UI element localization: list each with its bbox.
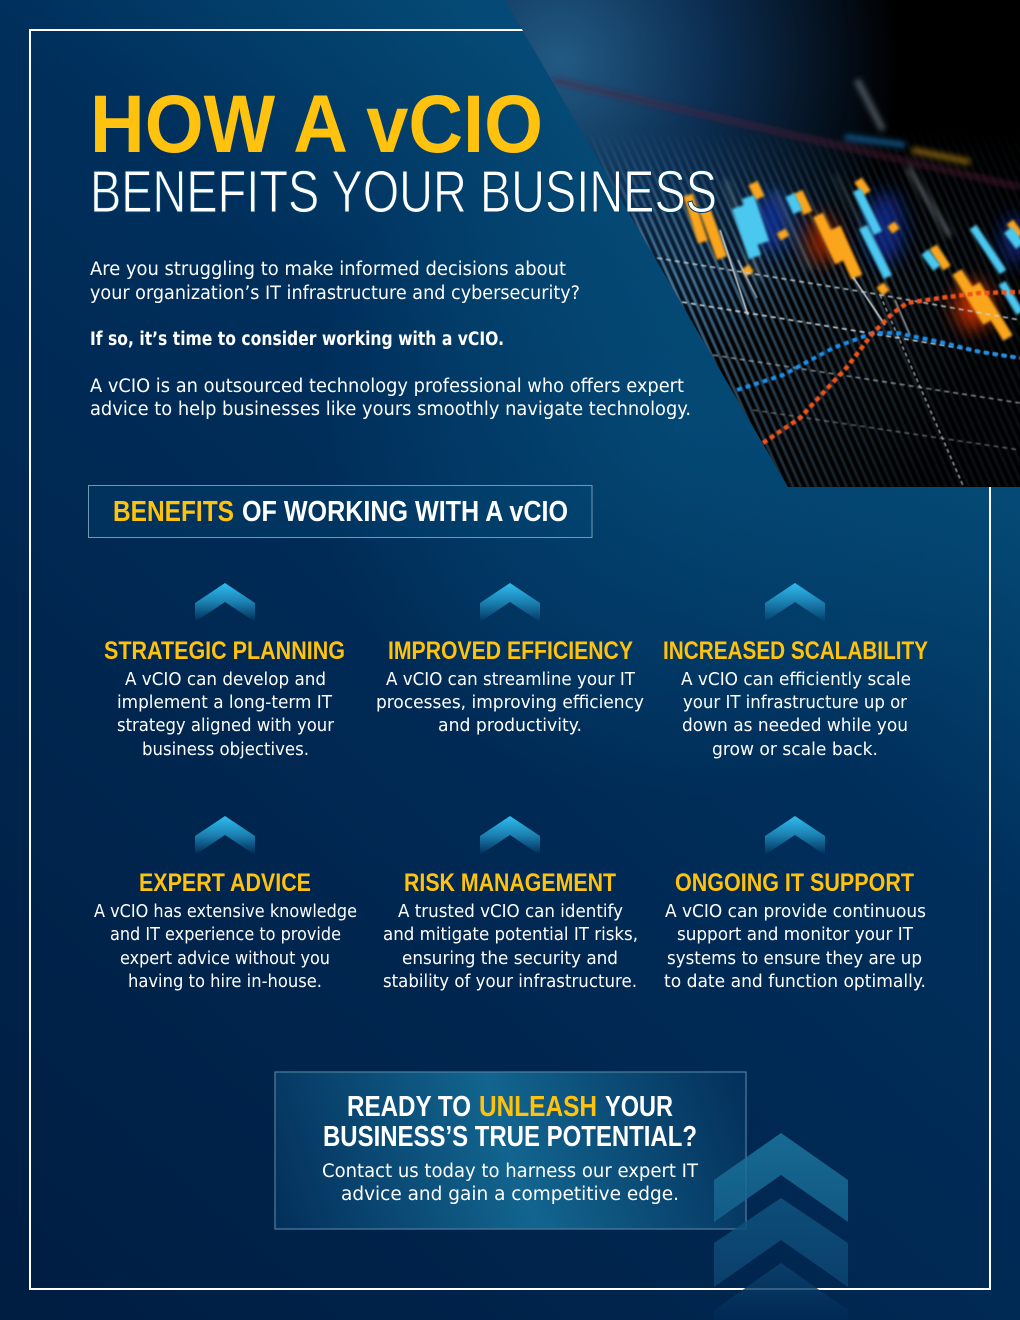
- candlesticks: orange: [688, 180, 1020, 338]
- title: BENEFITS YOUR BUSINESS: [90, 159, 717, 225]
- description: A vCIO can provide continuous: [665, 902, 926, 922]
- description: ensuring the security and: [402, 949, 618, 969]
- title: [90, 79, 717, 225]
- description: A vCIO has extensive knowledge: [94, 902, 357, 922]
- cta text: Contact us today to harness our expert IT: [322, 1161, 699, 1182]
- title: HOW A vCIO: [90, 79, 543, 170]
- description: implement a long-term IT: [117, 693, 332, 713]
- intro text: If so, it’s time to consider working with a vCIO.: [90, 329, 504, 350]
- description: A vCIO can efficiently scale: [681, 670, 911, 690]
- benefits heading box: [88, 486, 592, 538]
- description: [376, 670, 644, 736]
- red trend line: [763, 292, 1020, 443]
- heading: RISK MANAGEMENT: [404, 869, 616, 897]
- description: [681, 670, 911, 760]
- dashed grid lines: [657, 258, 1020, 490]
- icon: chevron: [480, 583, 540, 622]
- description: [383, 902, 638, 992]
- cta headline: UNLEASH: [479, 1091, 597, 1123]
- heading: STRATEGIC PLANNING: [104, 637, 345, 665]
- intro text: [90, 259, 691, 420]
- description: systems to ensure they are up: [667, 949, 922, 969]
- light wicks: [720, 230, 910, 335]
- fine diagonal stripes: [596, 144, 1020, 487]
- benefit: ongoing it support: [664, 816, 926, 992]
- description: your IT infrastructure up or: [683, 693, 908, 713]
- description: stability of your infrastructure.: [383, 972, 637, 992]
- icon: chevron: [195, 816, 255, 855]
- trading chart image panel: [500, 0, 1020, 490]
- heading: EXPERT ADVICE: [139, 869, 311, 897]
- benefits heading box: OF WORKING WITH A vCIO: [242, 496, 568, 528]
- description: grow or scale back.: [712, 740, 878, 760]
- description: processes, improving efficiency: [376, 693, 644, 713]
- benefit: risk management: [383, 816, 638, 992]
- blurred glows: [756, 192, 1020, 330]
- call to action panel: [275, 1072, 746, 1229]
- description: to date and function optimally.: [664, 972, 926, 992]
- heading: INCREASED SCALABILITY: [663, 637, 928, 665]
- description: A vCIO can develop and: [125, 670, 326, 690]
- benefit: improved efficiency: [376, 583, 644, 736]
- description: [94, 902, 357, 992]
- description: down as needed while you: [682, 716, 908, 736]
- description: support and monitor your IT: [677, 925, 913, 945]
- heading: ONGOING IT SUPPORT: [675, 869, 914, 897]
- candlesticks: cyan: [738, 190, 1020, 313]
- icon: chevron: [765, 583, 825, 622]
- faint red and gray streaks: [553, 80, 1020, 280]
- cta text: [322, 1161, 699, 1205]
- cta headline: YOUR: [605, 1091, 673, 1123]
- benefit: strategic planning: [104, 583, 345, 760]
- intro text: advice to help businesses like yours smoothly navigate technology.: [90, 399, 691, 420]
- benefit: increased scalability: [663, 583, 928, 760]
- intro text: A vCIO is an outsourced technology professional who offers expert: [90, 376, 684, 397]
- benefit: expert advice: [94, 816, 357, 992]
- cta headline: READY TO: [347, 1091, 471, 1123]
- description: and IT experience to provide: [110, 925, 341, 945]
- cta headline: BUSINESS’S TRUE POTENTIAL?: [323, 1121, 697, 1153]
- description: having to hire in-house.: [128, 972, 322, 992]
- benefits heading box: BENEFITS: [113, 496, 234, 528]
- description: business objectives.: [142, 740, 309, 760]
- heading: IMPROVED EFFICIENCY: [388, 637, 633, 665]
- description: A trusted vCIO can identify: [398, 902, 623, 922]
- icon: chevron: [765, 816, 825, 855]
- icon: chevron: [480, 816, 540, 855]
- intro text: your organization’s IT infrastructure and cybersecurity?: [90, 283, 580, 304]
- description: A vCIO can streamline your IT: [386, 670, 635, 690]
- description: and mitigate potential IT risks,: [383, 925, 638, 945]
- decorative large chevrons: [714, 1133, 848, 1320]
- description: expert advice without you: [120, 949, 330, 969]
- cta text: advice and gain a competitive edge.: [341, 1184, 679, 1205]
- cta headline: [323, 1091, 697, 1153]
- description: strategy aligned with your: [117, 716, 335, 736]
- icon: chevron: [195, 583, 255, 622]
- description: and productivity.: [438, 716, 582, 736]
- intro text: Are you struggling to make informed decisions about: [90, 259, 566, 280]
- description: [117, 670, 335, 760]
- description: [664, 902, 926, 992]
- blue trend line: [737, 333, 1020, 390]
